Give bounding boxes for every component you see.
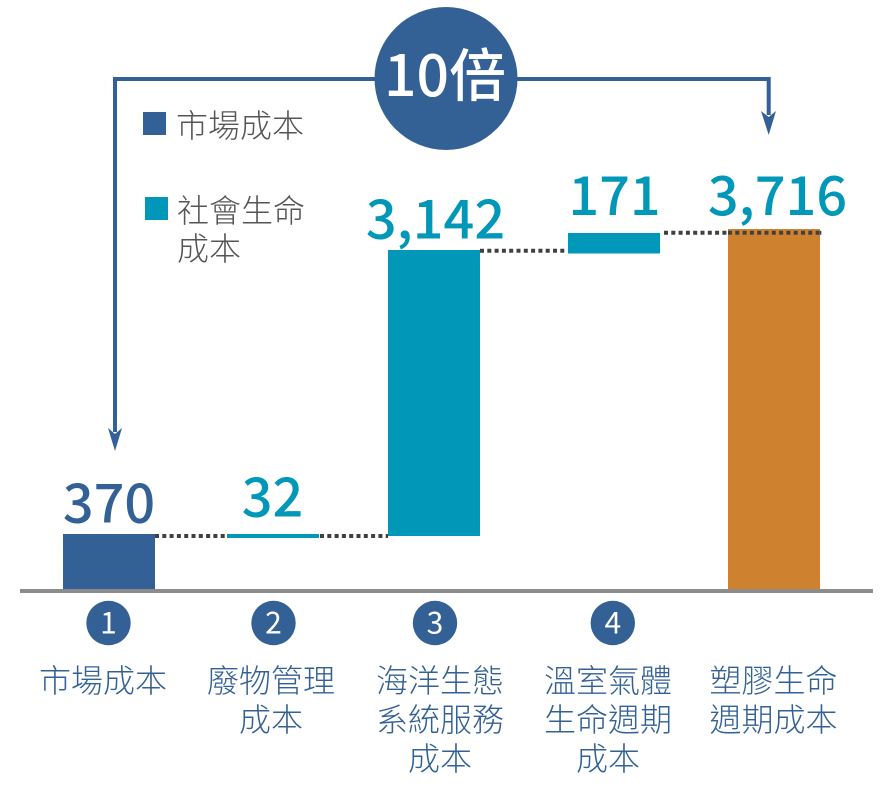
label: plastic life cycle cost: 塑膠生命 bbox=[709, 656, 838, 702]
marker 3 bbox=[413, 598, 457, 645]
label: greenhouse gas life cycle cost: 成本 bbox=[576, 734, 640, 780]
label: marine ecosystem services cost: 海洋生態 bbox=[376, 656, 504, 702]
category labels bbox=[39, 656, 838, 780]
label: greenhouse gas life cycle cost: 生命週期 bbox=[544, 695, 672, 741]
legend item: market cost: 市場成本 bbox=[176, 101, 304, 147]
bar 3: marine ecosystem services cost bbox=[388, 250, 480, 536]
marker 3: 3 bbox=[427, 598, 443, 642]
label: marine ecosystem services cost bbox=[376, 656, 504, 780]
value: 3,716: 3,716 bbox=[708, 152, 847, 231]
badge: 10 times bbox=[374, 7, 518, 150]
baseline axis bbox=[20, 589, 873, 593]
label: waste management cost: 廢物管理 bbox=[207, 656, 335, 702]
label: greenhouse gas life cycle cost: 溫室氣體 bbox=[544, 656, 672, 702]
arrow: right bracket from badge down to bar 5 bbox=[517, 79, 776, 135]
marker 1: 1 bbox=[100, 598, 117, 642]
label: waste management cost: 成本 bbox=[239, 695, 303, 741]
bar 4: greenhouse gas life cycle cost bbox=[568, 233, 660, 254]
step markers bbox=[86, 598, 635, 645]
marker 1 bbox=[86, 598, 131, 645]
marker 2 bbox=[251, 598, 296, 645]
value: 370: 370 bbox=[63, 460, 155, 538]
legend item: social life cycle cost: 社會生命 bbox=[177, 186, 305, 232]
value: 171: 171 bbox=[568, 152, 661, 231]
arrow: left bracket from badge down to bar 1 bbox=[108, 79, 375, 451]
value labels bbox=[63, 152, 847, 538]
label: plastic life cycle cost bbox=[709, 656, 838, 741]
label: waste management cost bbox=[207, 656, 335, 741]
legend bbox=[143, 101, 305, 270]
marker 4 bbox=[591, 598, 635, 645]
label: marine ecosystem services cost: 系統服務 bbox=[376, 695, 504, 741]
bar 5: plastic life cycle cost bbox=[728, 229, 820, 589]
label: marine ecosystem services cost: 成本 bbox=[408, 734, 472, 780]
connector dotted lines bbox=[155, 233, 822, 536]
marker 2: 2 bbox=[265, 598, 282, 642]
legend item: social life cycle cost: 成本 bbox=[177, 224, 241, 270]
value: 32: 32 bbox=[242, 454, 303, 532]
value: 3,142: 3,142 bbox=[366, 176, 505, 254]
marker 4: 4 bbox=[604, 598, 621, 642]
label: greenhouse gas life cycle cost bbox=[544, 656, 672, 780]
label: plastic life cycle cost: 週期成本 bbox=[709, 695, 838, 741]
badge: 10 times: 10倍 bbox=[384, 31, 506, 113]
label: market cost: 市場成本 bbox=[39, 656, 167, 702]
dotted line over orange bar bbox=[728, 231, 822, 235]
bar 2: waste management cost bbox=[227, 534, 319, 538]
waterfall chart bars bbox=[63, 229, 820, 589]
legend item: social life cycle cost bbox=[145, 186, 305, 270]
bar 1: market cost bbox=[63, 534, 155, 589]
